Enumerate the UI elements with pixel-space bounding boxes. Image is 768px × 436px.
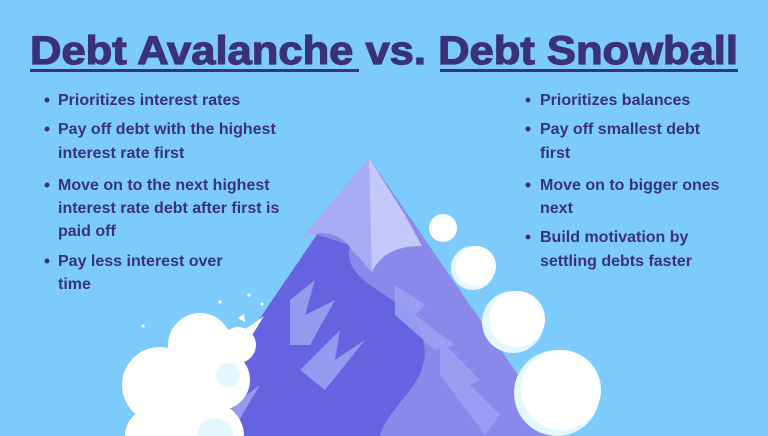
right list: debt snowball: first	[540, 145, 571, 162]
right list: debt snowball: settling debts faster	[540, 253, 692, 270]
left list: debt avalanche: interest rate first	[58, 145, 185, 162]
right list: debt snowball: Pay off smallest debt	[540, 121, 701, 138]
left list: debt avalanche: paid off	[58, 223, 116, 240]
left list: debt avalanche: Pay off debt with the highest	[58, 121, 276, 138]
title: Debt Avalanche vs. Debt Snowball	[30, 29, 738, 73]
snowballs	[429, 214, 601, 436]
left list: debt avalanche: Move on to the next highest	[58, 177, 270, 194]
right list: debt snowball: Build motivation by	[540, 229, 689, 246]
right list: debt snowball	[526, 92, 720, 270]
right list: debt snowball: Move on to bigger ones	[540, 177, 720, 194]
right list: debt snowball: next	[540, 200, 574, 217]
left list: debt avalanche: interest rate debt after first is	[58, 200, 280, 217]
right list: debt snowball: Prioritizes balances	[540, 92, 690, 109]
left list: debt avalanche: time	[58, 276, 91, 293]
clouds	[122, 293, 264, 436]
left list: debt avalanche	[44, 92, 280, 293]
left list: debt avalanche: Prioritizes interest rates	[58, 92, 240, 109]
left list: debt avalanche: Pay less interest over	[58, 253, 223, 270]
mountain	[230, 158, 560, 436]
